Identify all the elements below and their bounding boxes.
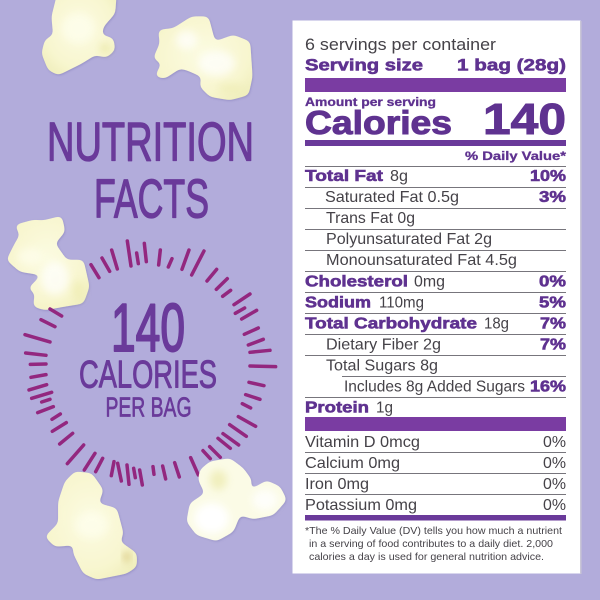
vitamins and minerals rows: [305, 434, 566, 514]
footnote: [305, 525, 562, 563]
nutrient rows: 18g: [484, 316, 509, 332]
calories callout: PER BAG: [106, 392, 192, 423]
title: nutrition facts: NUTRITION: [47, 112, 254, 172]
nutrient rows: Cholesterol: [305, 274, 408, 290]
medium divider bar: [305, 515, 566, 520]
medium divider bar: [305, 140, 566, 146]
row rules: [305, 166, 566, 494]
icon: popcorn bottom left: [45, 472, 137, 579]
nutrient rows: Sodium: [305, 294, 371, 312]
calories heading: Calories: [305, 104, 452, 141]
thick divider bar: [305, 417, 566, 431]
title: nutrition facts: FACTS: [94, 168, 209, 230]
nutrient rows: 7%: [540, 336, 566, 354]
serving information: 6 servings per container: [305, 36, 497, 54]
nutrient rows: Monounsaturated Fat 4.5g: [326, 252, 517, 269]
thick divider bar: [305, 78, 566, 92]
nutrient rows: 10%: [530, 168, 566, 185]
nutrient rows: Protein: [305, 400, 369, 416]
nutrient rows: 16%: [530, 378, 566, 396]
vitamins and minerals rows: 0%: [543, 434, 566, 451]
vitamins and minerals rows: Potassium 0mg: [305, 497, 417, 514]
nutrient rows: Total Fat: [305, 168, 384, 185]
daily value heading: % Daily Value*: [465, 151, 567, 163]
icon: popcorn mid left: [7, 216, 89, 310]
vitamins and minerals rows: Calcium 0mg: [305, 455, 400, 472]
title: nutrition facts: [47, 112, 254, 230]
nutrient rows: Trans Fat 0g: [326, 210, 415, 227]
calories callout: [79, 290, 217, 423]
vitamins and minerals rows: Vitamin D 0mcg: [305, 434, 420, 451]
nutrient rows: Polyunsaturated Fat 2g: [326, 231, 492, 248]
vitamins and minerals rows: 0%: [543, 476, 566, 493]
nutrient rows: Dietary Fiber 2g: [326, 336, 441, 354]
nutrient rows: 1g: [376, 400, 393, 416]
icon: popcorn top centre: [153, 17, 252, 100]
nutrient rows: [305, 168, 566, 416]
nutrient rows: 0%: [539, 274, 566, 290]
serving information: 1 bag (28g): [457, 56, 566, 74]
nutrient rows: Total Carbohydrate: [305, 316, 477, 332]
nutrient rows: 110mg: [379, 294, 424, 312]
serving information: [305, 36, 566, 74]
nutrient rows: Includes 8g Added Sugars: [344, 378, 525, 396]
vitamins and minerals rows: Iron 0mg: [305, 476, 369, 493]
calories heading: [305, 95, 566, 144]
nutrient rows: Total Sugars 8g: [326, 358, 438, 374]
footnote: *The % Daily Value (DV) tells you how much a nutrient: [305, 525, 562, 537]
nutrient rows: 0mg: [414, 274, 445, 290]
nutrient rows: 3%: [539, 189, 566, 206]
footnote: in a serving of food contributes to a daily diet. 2,000: [309, 538, 553, 550]
calories heading: 140: [483, 95, 566, 144]
calories callout: CALORIES: [79, 354, 217, 396]
calories callout: 140: [111, 290, 185, 366]
serving information: Serving size: [305, 56, 423, 74]
calories heading: Amount per serving: [305, 97, 436, 109]
panel: nutrition label: [292, 20, 582, 574]
nutrient rows: Saturated Fat 0.5g: [325, 189, 459, 206]
icon: popcorn bottom right: [187, 458, 287, 541]
nutrient rows: 8g: [390, 168, 408, 185]
footnote: calories a day is used for general nutrition advice.: [309, 551, 544, 563]
nutrient rows: 5%: [539, 294, 566, 312]
vitamins and minerals rows: 0%: [543, 455, 566, 472]
vitamins and minerals rows: 0%: [543, 497, 566, 514]
nutrient rows: 7%: [540, 316, 566, 332]
starburst ring of tick marks: [25, 241, 276, 485]
icon: popcorn top left: [42, 0, 117, 75]
